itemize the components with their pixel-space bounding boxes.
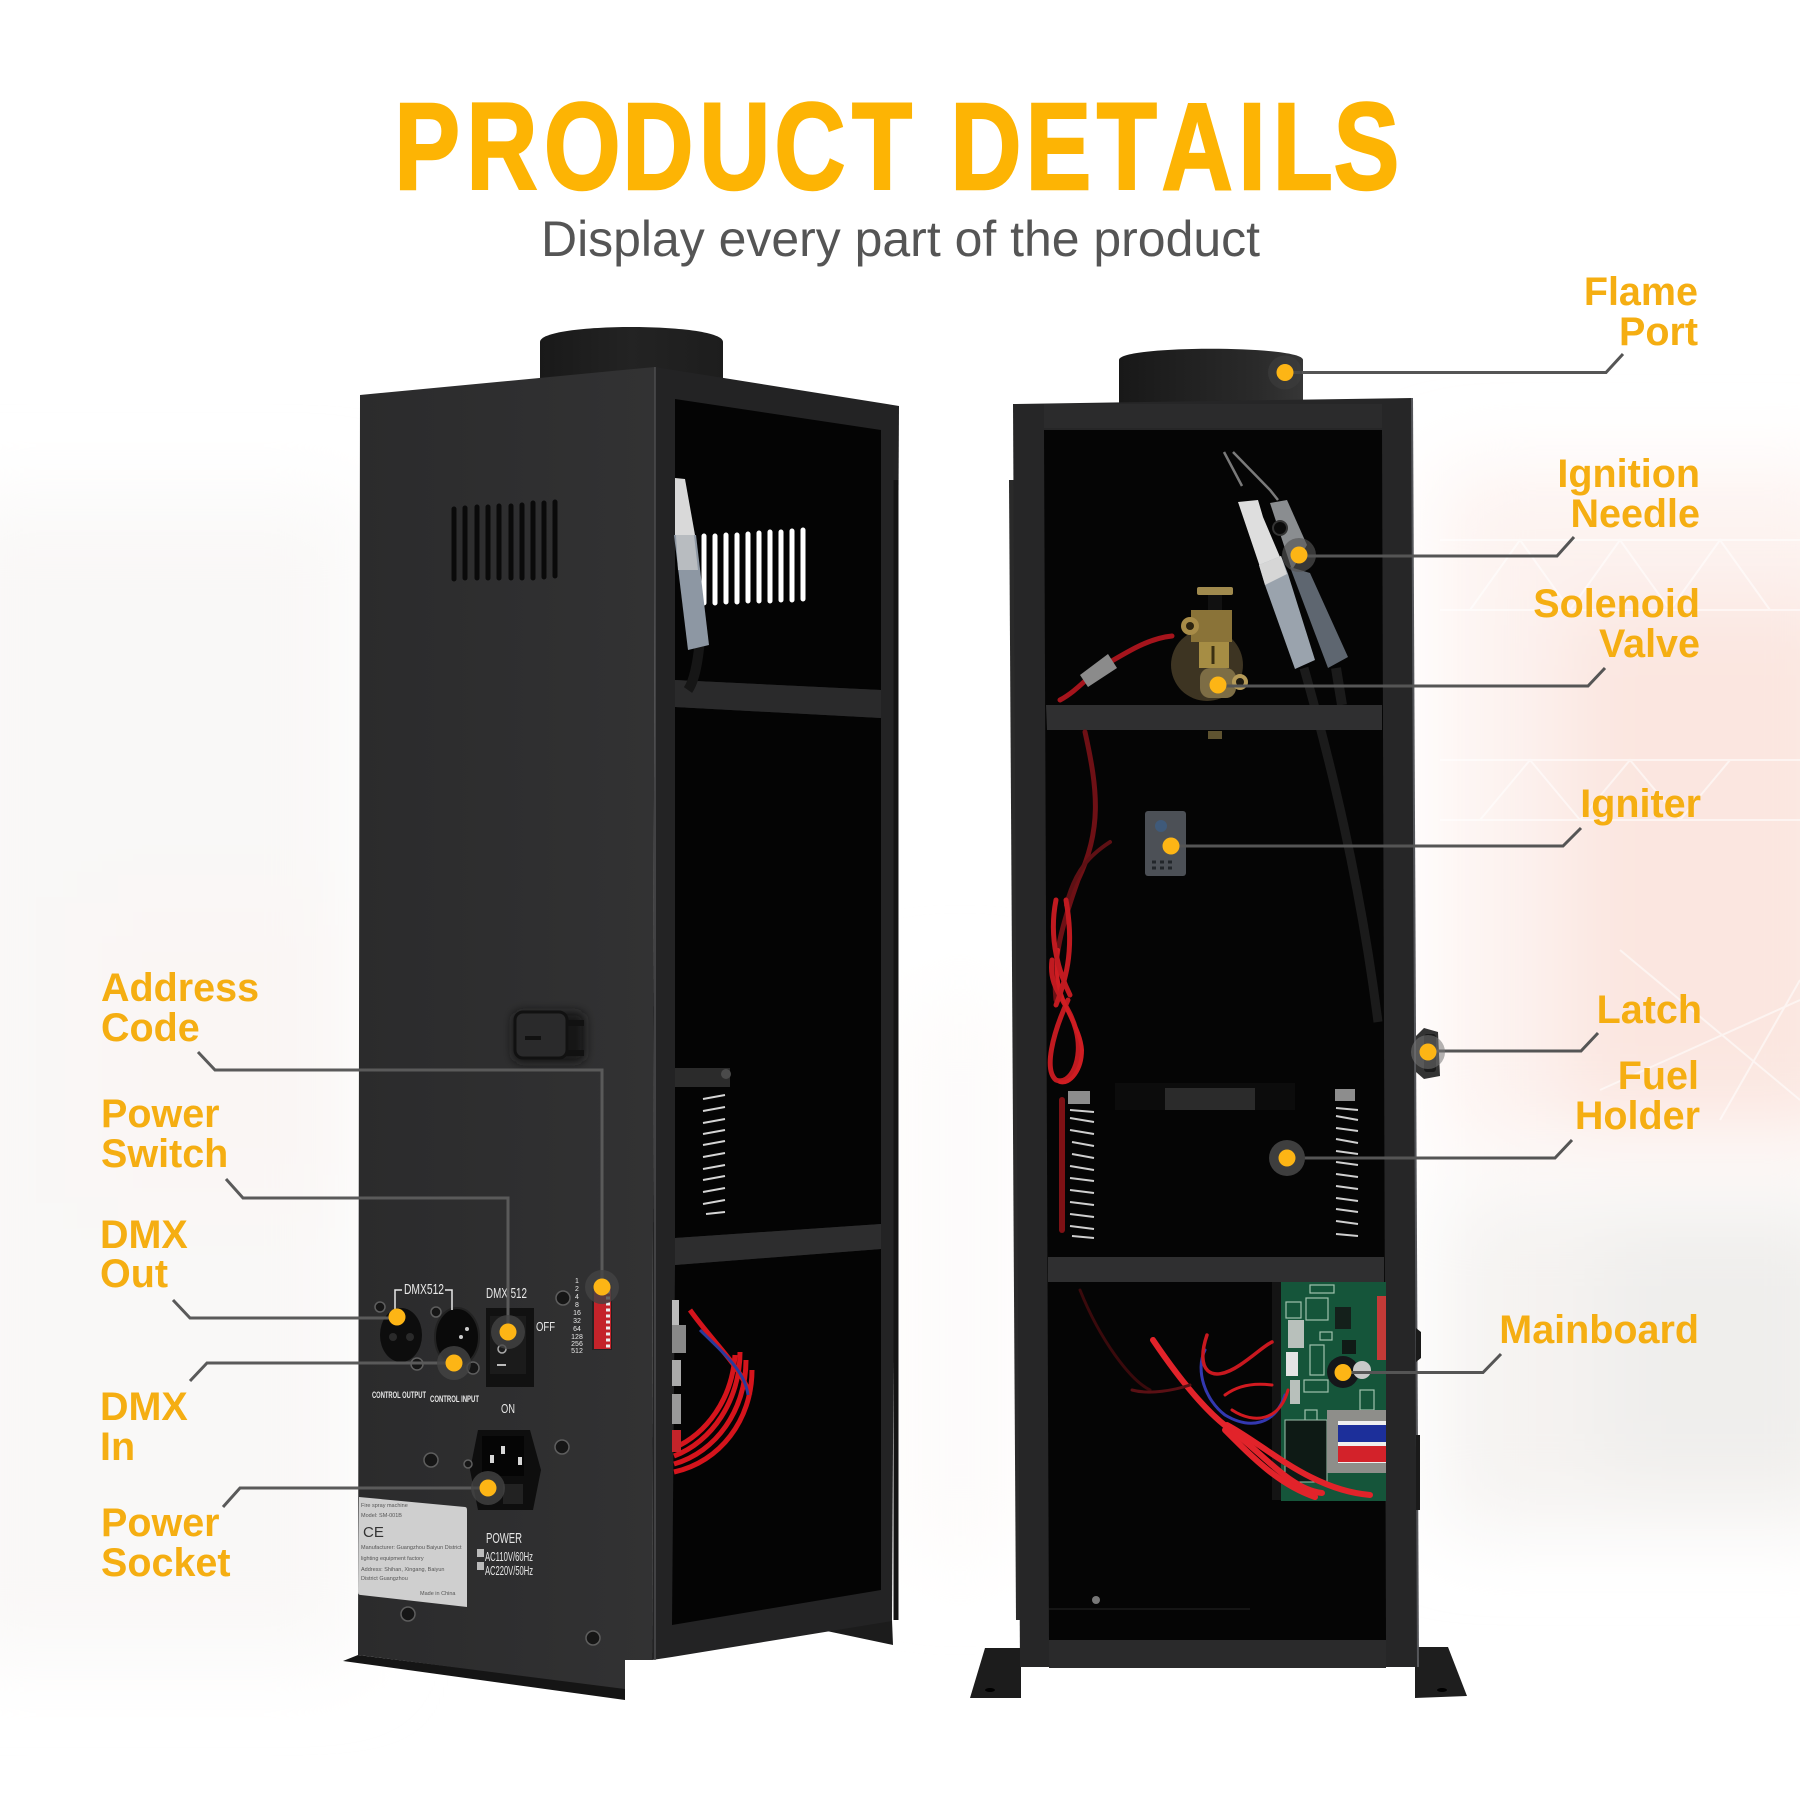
callout: Fuel Holder <box>1269 1054 1700 1176</box>
rating sticker <box>358 1497 467 1607</box>
fuel holder spring <box>675 1068 731 1214</box>
callout: Power Socket: Power <box>101 1501 220 1545</box>
rating sticker: Made in China <box>420 1591 456 1597</box>
panel markings: 128 <box>571 1334 583 1341</box>
callout: Ignition Needle <box>1282 452 1700 572</box>
mainboard <box>1272 1282 1386 1501</box>
callout: Flame Port: Flame <box>1584 270 1698 314</box>
interior <box>1044 430 1386 1640</box>
top bar <box>1044 404 1382 428</box>
wires and connectors <box>672 1300 752 1472</box>
panel markings: 64 <box>573 1326 581 1333</box>
base screw <box>1092 1596 1100 1604</box>
panel markings: CONTROL OUTPUT <box>372 1390 426 1401</box>
front frame <box>652 367 899 1660</box>
callout: DMX In: DMX <box>100 1385 188 1429</box>
callout: Fuel Holder: Holder <box>1575 1094 1700 1138</box>
ignition cables <box>1304 668 1378 1022</box>
callout: DMX Out <box>100 1213 406 1326</box>
rating sticker: Address: Shihan, Xingang, Baiyun <box>361 1567 444 1573</box>
callout: Flame Port: Port <box>1619 310 1698 354</box>
vent slots on rear panel <box>454 502 555 579</box>
rating sticker: Fire spray machine <box>361 1503 408 1509</box>
callout: Solenoid Valve <box>1210 582 1700 694</box>
callout: Solenoid Valve: Valve <box>1599 622 1700 666</box>
callout: DMX In: In <box>100 1425 135 1469</box>
power socket <box>470 1430 541 1510</box>
callout: Power Switch: Switch <box>101 1132 228 1176</box>
flame port (front view) <box>1119 349 1303 404</box>
callout: Ignition Needle: Ignition <box>1557 452 1700 496</box>
callout: DMX Out: Out <box>100 1252 168 1296</box>
panel markings: 2 <box>575 1286 579 1293</box>
rating sticker: CE <box>363 1524 384 1541</box>
rating sticker: District Guangzhou <box>361 1576 408 1582</box>
power switch <box>486 1308 534 1387</box>
transformer <box>1327 1410 1386 1473</box>
panel markings: 32 <box>573 1318 581 1325</box>
panel markings: ON <box>501 1401 515 1416</box>
panel markings: 256 <box>571 1341 583 1348</box>
panel markings: DMX 512 <box>486 1285 527 1302</box>
panel markings: 8 <box>575 1302 579 1309</box>
title: PRODUCT DETAILS <box>394 77 1399 216</box>
rear panel <box>358 367 655 1689</box>
callout: Address Code: Address <box>101 966 259 1010</box>
panel markings: 16 <box>573 1310 581 1317</box>
callout: Address Code <box>101 966 619 1304</box>
panel markings: DMX512 <box>404 1281 444 1298</box>
solenoid valve <box>1171 587 1248 739</box>
springs <box>1068 1089 1358 1238</box>
wire bundle <box>1132 1335 1370 1497</box>
panel markings <box>372 1278 583 1578</box>
panel markings: AC220V/50Hz <box>485 1564 533 1578</box>
latch <box>1416 1028 1440 1079</box>
outer frame <box>1013 398 1418 1667</box>
panel markings: 1 <box>575 1278 579 1285</box>
callout: Address Code: Code <box>101 1006 200 1050</box>
callout: DMX Out: DMX <box>100 1213 188 1257</box>
bottom bar <box>1049 1640 1386 1668</box>
panel markings: AC110V/60Hz <box>485 1550 533 1564</box>
callout: Power Socket <box>101 1471 505 1585</box>
side switch notch <box>1416 1328 1421 1510</box>
callout: Power Switch: Power <box>101 1092 220 1136</box>
panel markings: CONTROL INPUT <box>430 1394 479 1405</box>
DMX output socket <box>380 1308 422 1362</box>
latch on rear panel <box>513 1012 585 1062</box>
callout: Mainboard <box>1334 1308 1699 1381</box>
right cabinet: front view <box>970 349 1467 1698</box>
shelf 1 <box>1046 705 1382 730</box>
panel markings: 4 <box>575 1294 579 1301</box>
igniter box <box>1145 811 1186 876</box>
hinge strip <box>1009 480 1021 1620</box>
callout: Igniter <box>1162 782 1701 854</box>
callout: Igniter: Igniter <box>1580 782 1701 826</box>
subtitle: Display every part of the product <box>541 211 1260 267</box>
flame port (rear view) <box>540 327 723 392</box>
red wires <box>1050 636 1172 1390</box>
screws <box>375 1291 600 1645</box>
address code DIP switch <box>592 1284 612 1350</box>
callout: DMX In <box>100 1346 471 1469</box>
foot plates <box>970 1647 1467 1698</box>
rating sticker: Model: SM-001B <box>361 1513 402 1519</box>
foot plates <box>343 1620 893 1700</box>
callout: Power Socket: Socket <box>101 1541 231 1585</box>
ignition sleeve <box>674 478 709 690</box>
rating sticker: Manufacturer: Guangzhou Baiyun District <box>361 1545 462 1551</box>
panel markings: OFF <box>536 1319 555 1334</box>
panel markings: 512 <box>571 1348 583 1355</box>
wire connector <box>1080 654 1117 687</box>
vent slots seen from inside <box>704 530 803 603</box>
callout: Latch <box>1411 988 1702 1069</box>
left cabinet: rear view <box>343 327 899 1700</box>
callout: Mainboard: Mainboard <box>1499 1308 1699 1352</box>
cabinet compartments <box>672 399 881 1625</box>
callout: Flame Port <box>1268 270 1698 390</box>
shelf 2 <box>1048 1257 1384 1282</box>
callout: Fuel Holder: Fuel <box>1618 1054 1699 1098</box>
callout: Solenoid Valve: Solenoid <box>1533 582 1700 626</box>
fuel holder <box>1115 1083 1295 1110</box>
callout: Ignition Needle: Needle <box>1570 492 1700 536</box>
ignition needles <box>1224 452 1348 669</box>
callout: Power Switch <box>101 1092 525 1349</box>
DMX input socket <box>435 1308 479 1366</box>
panel markings: POWER <box>486 1530 522 1547</box>
callout: Latch: Latch <box>1597 988 1702 1032</box>
rating sticker: lighting equipment factory <box>361 1556 424 1562</box>
